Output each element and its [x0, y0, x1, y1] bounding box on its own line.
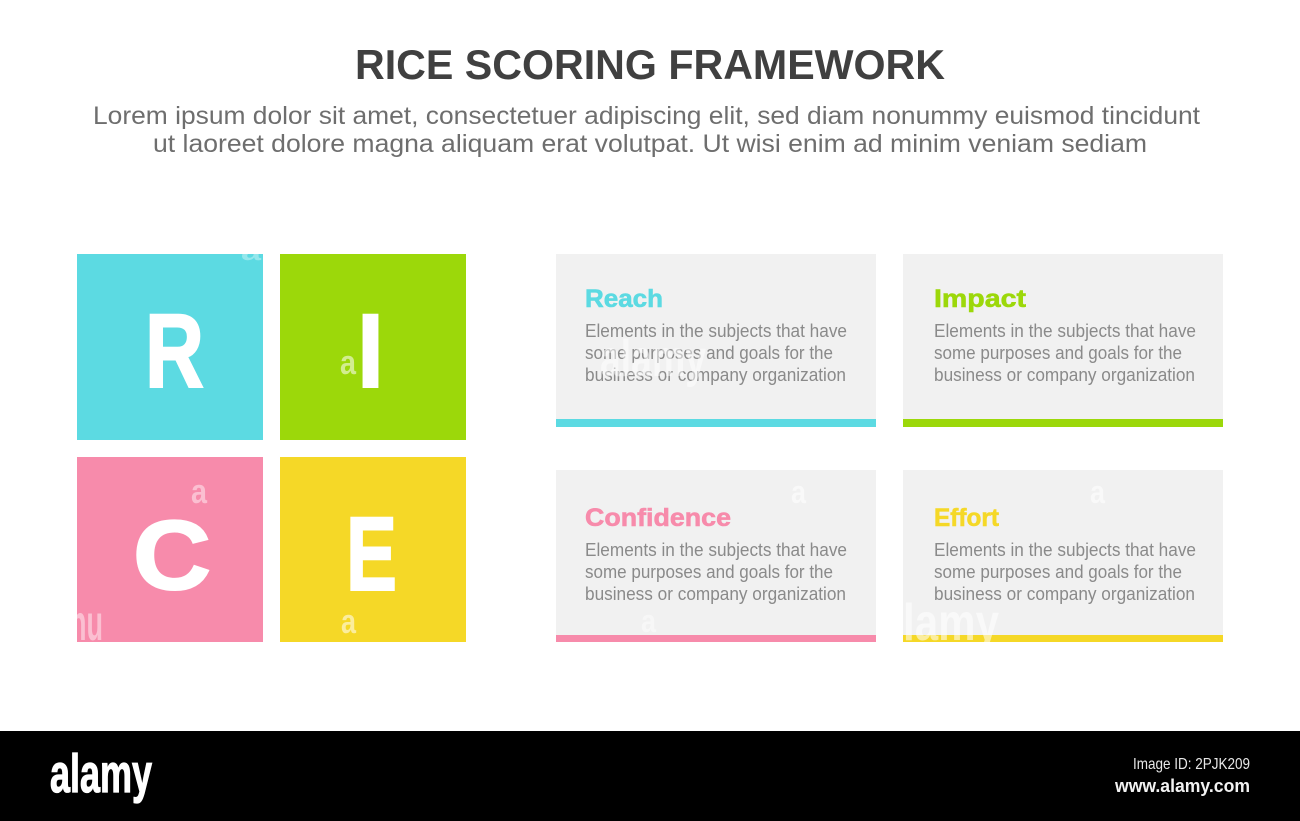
tile: C: C [133, 500, 211, 610]
tile: R: R [145, 293, 204, 410]
panel: Effort card: a [1090, 474, 1105, 510]
footer bar [0, 731, 1300, 821]
subtitle text block [93, 102, 1200, 158]
panel: Confidence card: a [641, 603, 656, 639]
title: RICE SCORING FRAMEWORK [355, 41, 945, 88]
heading: Confidence: Confidence [585, 504, 731, 532]
tile: E [280, 457, 466, 642]
tile: R: a [241, 236, 262, 266]
panel: Effort card [903, 470, 1223, 652]
body text: Confidence [585, 540, 847, 604]
panel: Reach card: alamy [600, 330, 706, 388]
subtitle text block: Lorem ipsum dolor sit amet, consectetuer adipiscing elit, sed diam nonummy euismod tincidunt [93, 102, 1200, 130]
body text: Confidence: some purposes and goals for the [585, 562, 833, 582]
heading: Reach: Reach [585, 285, 663, 313]
image id: Image ID: 2PJK209 [1133, 756, 1250, 773]
tile: C: a [191, 473, 208, 511]
tile: E: E [346, 496, 397, 613]
panel: Effort card: lamy [903, 594, 999, 652]
body text: Impact: some purposes and goals for the [934, 343, 1182, 363]
tile: C [70, 457, 263, 651]
body text: Effort: business or company organization [934, 584, 1195, 604]
tile: I [280, 254, 466, 440]
tile: I: a [340, 344, 357, 382]
body text: Reach: some purposes and goals for the [585, 343, 833, 363]
heading: Impact: Impact [934, 285, 1027, 313]
body text: Effort [934, 540, 1196, 604]
body text: Reach: business or company organization [585, 365, 846, 385]
body text: Effort: some purposes and goals for the [934, 562, 1182, 582]
footer logo: alamy [50, 744, 152, 804]
body text: Impact: business or company organization [934, 365, 1195, 385]
body text: Confidence: Elements in the subjects that have [585, 540, 847, 560]
heading: Effort: Effort [934, 504, 1000, 532]
tile: I: I [357, 293, 384, 410]
panel: Impact card [903, 254, 1223, 427]
panel: Reach card [556, 254, 876, 427]
panel: RICE letter grid [70, 236, 466, 651]
tile: C: nu [70, 595, 103, 651]
tile: R [77, 236, 263, 440]
panel: Confidence card: a [791, 474, 806, 510]
body text: Impact: Elements in the subjects that have [934, 321, 1196, 341]
tile: E: a [341, 603, 357, 641]
subtitle text block: ut laoreet dolore magna aliquam erat volutpat. Ut wisi enim ad minim veniam sediam [153, 130, 1147, 158]
body text: Reach: Elements in the subjects that have [585, 321, 847, 341]
body text: Effort: Elements in the subjects that have [934, 540, 1196, 560]
panel: Confidence card [556, 470, 876, 642]
website: www.alamy.com [1114, 776, 1250, 796]
body text: Reach [585, 321, 847, 385]
body text: Impact [934, 321, 1196, 385]
body text: Confidence: business or company organization [585, 584, 846, 604]
